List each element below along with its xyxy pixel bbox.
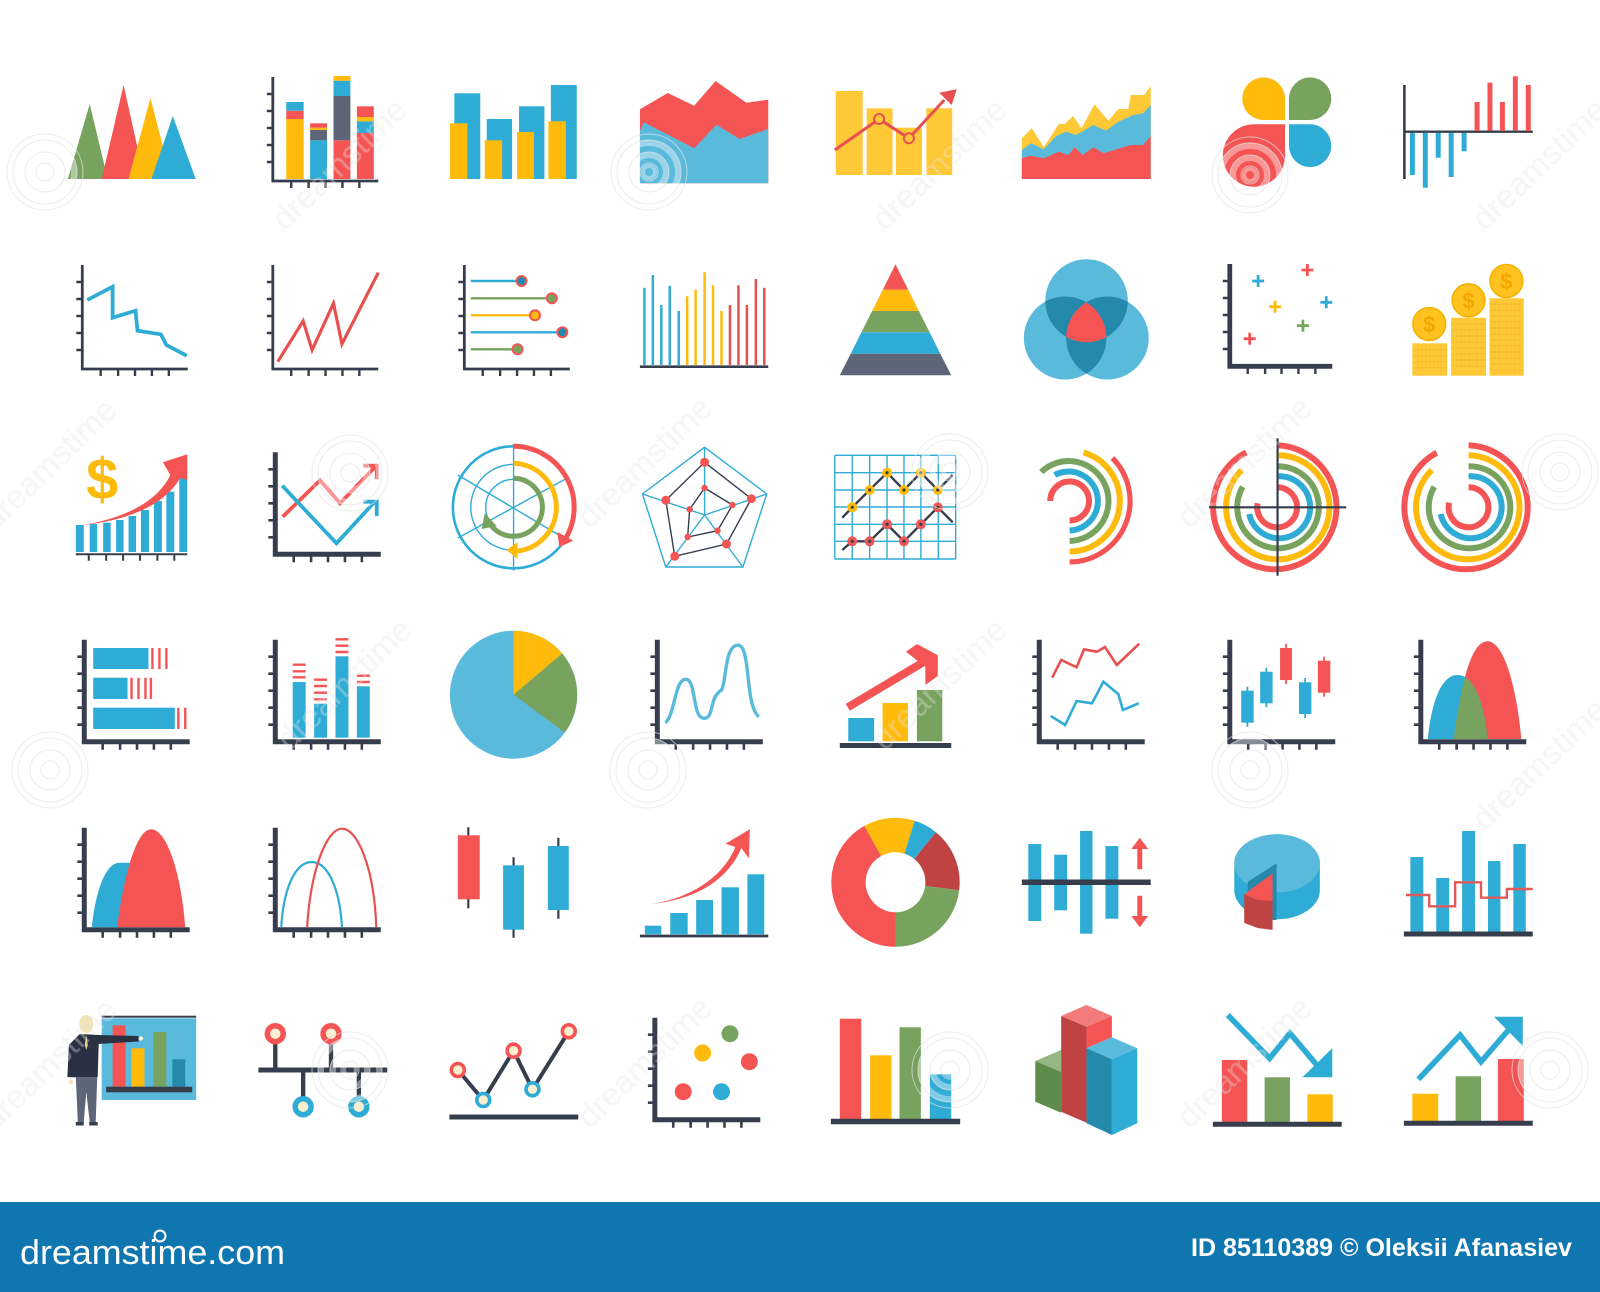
icon: venn diagram <box>1024 259 1149 380</box>
icon: smooth curve chart <box>650 640 763 750</box>
icon: thin vertical bars <box>640 272 768 367</box>
icon: 3d pie chart <box>1234 834 1320 930</box>
icon: radial rings with cross <box>1209 438 1346 576</box>
watermark text: dreamstime <box>569 389 719 535</box>
icon: donut chart <box>831 818 960 947</box>
icon: pie chart <box>450 631 577 759</box>
icon: falling bars with arrow <box>1213 1015 1342 1124</box>
watermark text: dreamstime <box>1169 389 1319 535</box>
watermark text: dreamstime <box>864 611 1014 757</box>
icon: bell area chart <box>77 828 190 938</box>
panel: icon rows 5-6 left <box>67 827 768 1128</box>
icon: grid line chart <box>835 455 956 559</box>
panel: icon rows 1-2 left <box>68 76 768 376</box>
icon: dollar growth chart <box>76 448 187 561</box>
watermark text: dreamstime <box>1169 989 1319 1135</box>
icon: crossing arrows chart <box>268 452 381 562</box>
icon: small candlesticks <box>1223 640 1335 750</box>
icon: four bars <box>831 1019 960 1122</box>
icon: jagged stacked area <box>1022 86 1151 179</box>
watermark text: dreamstime <box>264 91 414 237</box>
image credit: ID 85110389 © Oleksii Afanasiev <box>1191 1234 1572 1262</box>
icon: lollipop chart <box>458 265 570 376</box>
icon: bars with step line <box>1404 831 1533 934</box>
text: dollar signs on coins: $ <box>1500 269 1512 294</box>
icon: stacked bars with axis <box>267 76 378 188</box>
icon: bars with rising arrow <box>835 89 957 175</box>
icon: diverging bars <box>1404 76 1533 188</box>
icon: presenter with board <box>67 1015 196 1126</box>
icon: growth bars with curved arrow <box>640 829 768 936</box>
icon: half rainbow arcs <box>1041 452 1130 562</box>
icon: layered pyramid <box>840 264 951 375</box>
icon: plus scatter plot <box>1223 264 1332 374</box>
text: dollar sign: $ <box>86 448 118 512</box>
watermark text: dreamstime <box>269 611 419 757</box>
text: dollar signs on coins <box>1423 269 1512 337</box>
logo wordmark: dreamstime.com <box>20 1234 285 1272</box>
icon: outline bell curves <box>268 828 381 938</box>
watermark text: dreamstime <box>864 91 1014 237</box>
icon: bars across axis with arrows <box>1022 831 1151 934</box>
panel: icon rows 5-6 right <box>831 818 1533 1135</box>
icon: timeline pins <box>258 1026 387 1115</box>
panel: icon rows 1-2 right <box>835 76 1533 380</box>
icon: 3d bars <box>1035 1005 1137 1135</box>
icon: rising bars with arrow <box>1404 1017 1533 1123</box>
icon: two line chart <box>1032 640 1145 750</box>
icon: area chart <box>640 81 768 183</box>
text: dollar signs on coins: $ <box>1462 288 1475 313</box>
icon: rising line chart <box>267 265 378 376</box>
icon: falling line chart <box>76 265 188 376</box>
icon: triangle chart <box>68 85 196 179</box>
icon: radial arrows chart <box>453 444 574 571</box>
icon: vertical bars with stripes <box>268 639 381 750</box>
footer banner <box>0 1202 1600 1292</box>
text: dollar signs on coins: $ <box>1423 312 1435 337</box>
panel: icon rows 3-4 left <box>76 444 767 759</box>
icon: bars with big arrow <box>840 644 951 748</box>
icon: overlapping bell areas <box>1414 640 1526 750</box>
icon: four petal chart <box>1223 77 1331 187</box>
icon: overlapping bars <box>450 85 577 179</box>
icon: radial rings <box>1404 445 1528 569</box>
icon: large candlesticks <box>458 827 569 938</box>
panel: icon rows 3-4 right <box>835 438 1528 750</box>
icon: radar chart <box>642 447 767 567</box>
watermark text: dreamstime <box>569 989 719 1135</box>
icon: coin stacks <box>1412 264 1524 376</box>
icon: zigzag nodes chart <box>449 1025 578 1117</box>
icon: dot scatter plot <box>648 1018 760 1128</box>
icon: horizontal bars <box>77 640 190 750</box>
watermark rings <box>7 134 1598 1108</box>
logo spiral <box>154 1230 166 1242</box>
